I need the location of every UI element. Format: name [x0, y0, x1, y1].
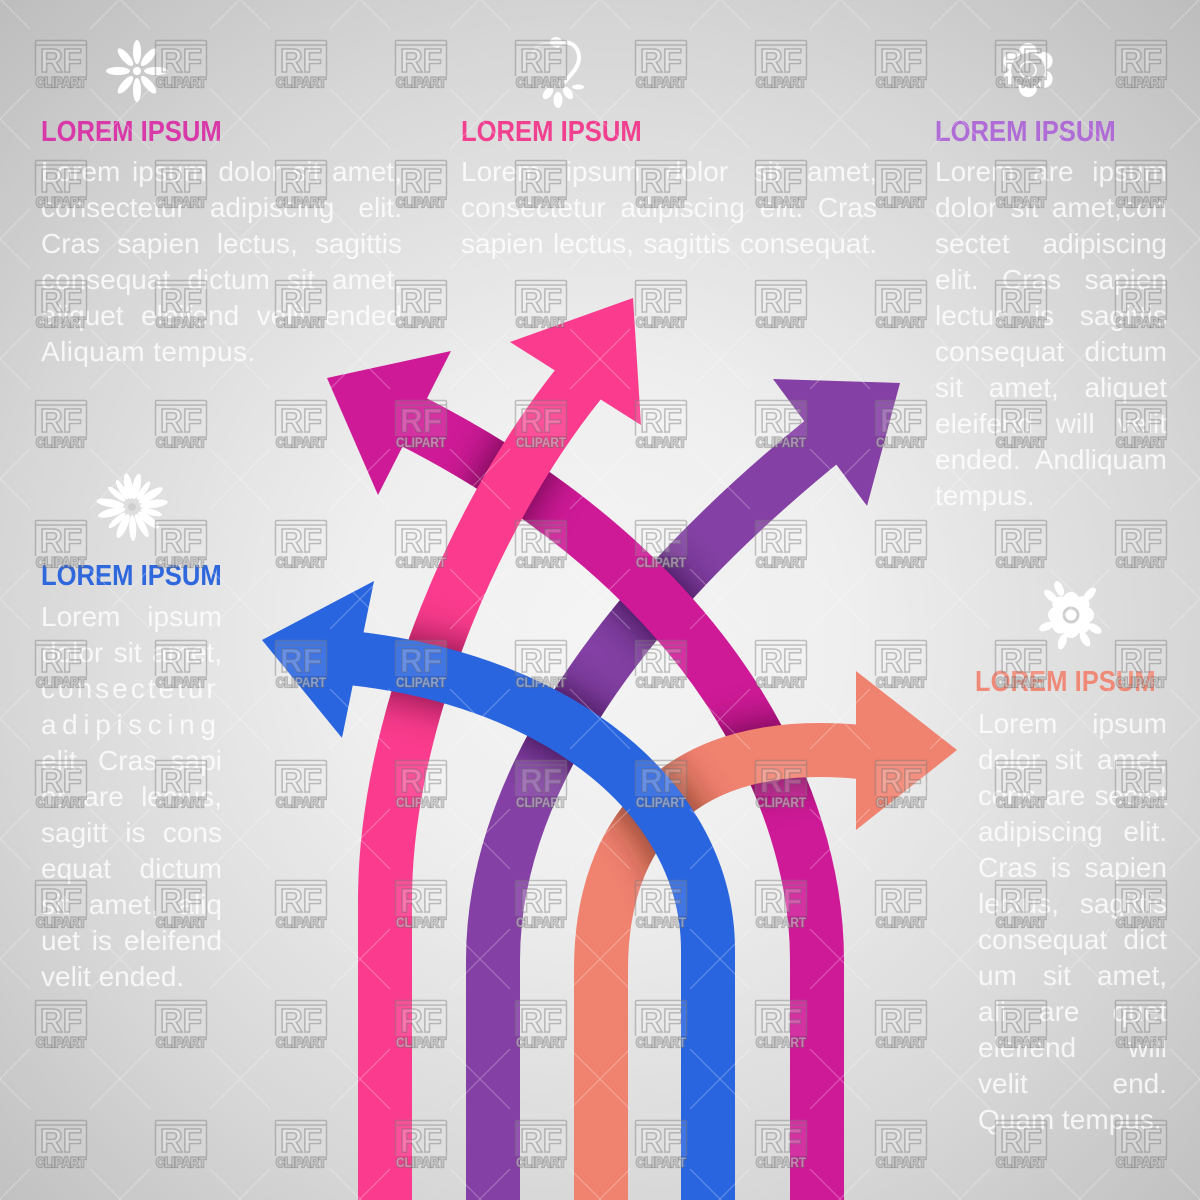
text block: right: consequat dict [978, 924, 1167, 955]
text block: right: Lorem ipsum [978, 708, 1167, 739]
text block: top left: aliquet eleifend velit ended [41, 300, 402, 331]
text block: right: cons are sectet [978, 780, 1167, 811]
text block: left: adipiscing [41, 709, 222, 740]
text block: top right: eleifend will velit [935, 408, 1167, 439]
heading: top right: LOREM IPSUM [935, 116, 1116, 148]
heading: top centre: LOREM IPSUM [461, 116, 642, 148]
text block: right: dolor sit amet, [978, 744, 1167, 775]
arrow: pink [358, 298, 641, 1200]
text block: left: elit. Cras sapi [41, 745, 222, 776]
text block: top right: consequat dictum [935, 336, 1167, 367]
arrow: purple [466, 379, 900, 1200]
icon: daisy left [96, 474, 168, 541]
text block: right: Cras is sapien [978, 852, 1167, 883]
text block: right: Quam tempus. [978, 1104, 1162, 1135]
text block: top centre: consectetur adipiscing elit. Cras [461, 192, 877, 223]
text block: right: eleifend will [978, 1032, 1167, 1063]
text block: top centre: sapien lectus, sagittis consequat. [461, 228, 877, 259]
text block: right: um sit amet, [978, 960, 1167, 991]
text block: right: lectus, sagittis [978, 888, 1167, 919]
text block: top right: elit. Cras sapien [935, 264, 1167, 295]
text block: top right: Lorem are ipsum [935, 156, 1167, 187]
text block: right: adipiscing elit. [978, 816, 1167, 847]
text block: left: dolor sit amet, [41, 637, 222, 668]
heading: top left: LOREM IPSUM [41, 116, 222, 148]
text block: left: or are lectus, [41, 781, 222, 812]
text block: left: sagitt is cons [41, 817, 222, 848]
heading: left: LOREM IPSUM [41, 560, 222, 592]
text block: right: ali are quet [978, 996, 1167, 1027]
icon: heart flower top centre [531, 37, 584, 108]
text block: top left: consequat dictum sit amet, [41, 264, 402, 295]
text block: top right: sectet adipiscing [935, 228, 1167, 259]
arrows diagram [262, 298, 957, 1200]
text block: left: Lorem ipsum [41, 601, 222, 632]
text block: top centre [461, 156, 877, 259]
arrow: magenta [327, 351, 860, 1200]
text block: top right: lectus is sagittis [935, 300, 1167, 331]
text block: top left: Lorem ipsum dolor sit amet, [41, 156, 402, 187]
text block: top left: Cras sapien lectus, sagittis [41, 228, 402, 259]
text block: left: uet is eleifend [41, 925, 222, 956]
text block: top left: Aliquam tempus. [41, 336, 256, 367]
text block: right: velit end. [978, 1068, 1167, 1099]
text block: right [978, 708, 1168, 1135]
text block: top right: sit amet, aliquet [935, 372, 1167, 403]
heading: right: LOREM IPSUM [975, 666, 1156, 698]
text block: left: sit amet, aliq [41, 889, 222, 920]
text block: top right: dolor sit amet,con [935, 192, 1167, 223]
icon: flower top right [1004, 43, 1052, 97]
text block: top left [41, 156, 402, 367]
arrow: blue [262, 581, 708, 1200]
text block: left [41, 601, 222, 992]
text block: left: consectetur [41, 673, 219, 704]
arrow: coral [574, 671, 957, 1200]
text block: top right: tempus. [935, 480, 1035, 511]
text block: top left: consectetur adipiscing elit. [41, 192, 402, 223]
text block: left: equat dictum [41, 853, 222, 884]
icon: flower top left [106, 40, 168, 102]
text block: top right: ended. Andliquam [935, 444, 1167, 475]
icon: flower right [1039, 581, 1102, 650]
text block: top centre: Lorem ipsum dolor sit amet, [461, 156, 877, 187]
text block: left: velit ended. [41, 961, 184, 992]
text block: top right [935, 156, 1167, 511]
